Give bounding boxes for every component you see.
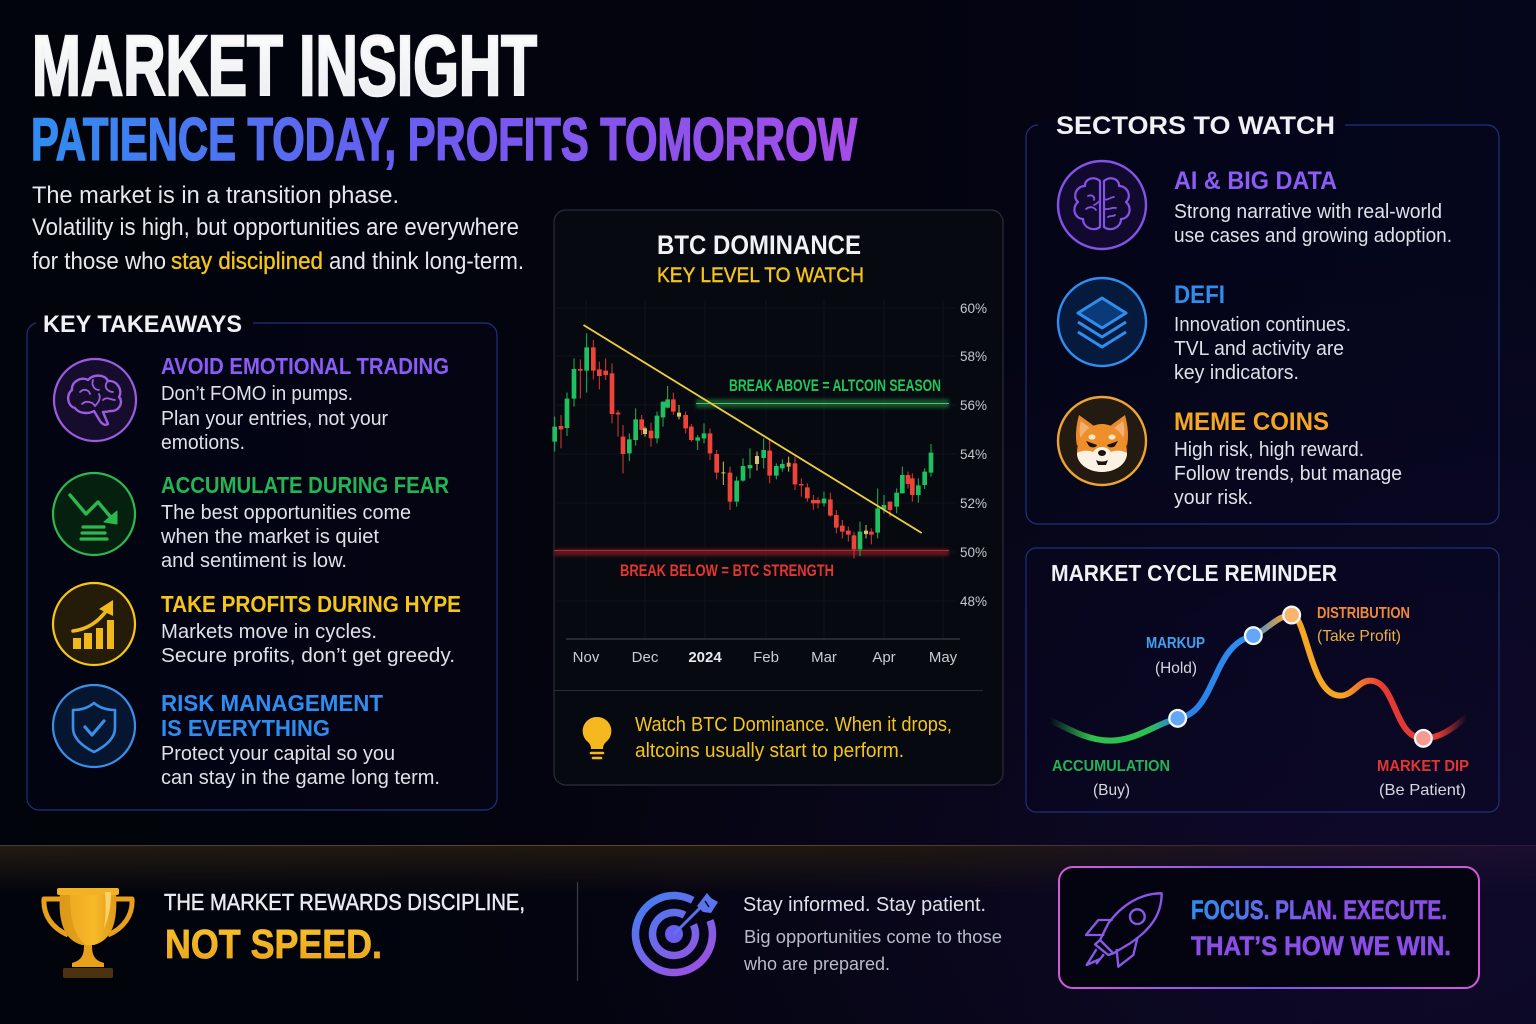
footer message	[164, 889, 525, 967]
y axis: 50%	[960, 545, 987, 560]
item: take profits during hype: Secure profits, don’t get greedy.	[161, 645, 455, 667]
item: defi: key indicators.	[1174, 362, 1299, 384]
marker: markup start	[1169, 710, 1186, 727]
chart note: Watch BTC Dominance. When it drops,	[635, 714, 952, 736]
y axis: 58%	[960, 349, 987, 364]
item: ai and big data: Strong narrative with real-world	[1174, 201, 1442, 223]
footer note: Stay informed. Stay patient.	[743, 894, 986, 916]
label: break above: BREAK ABOVE = ALTCOIN SEASON	[729, 377, 941, 395]
panel: sectors to watch	[1026, 112, 1499, 524]
icon: falling arrow	[53, 473, 135, 555]
candlestick chart	[554, 300, 987, 666]
icon: rising bars	[53, 583, 135, 665]
item: defi: TVL and activity are	[1174, 338, 1344, 360]
candles	[555, 333, 931, 558]
label: distribution: DISTRIBUTION	[1317, 605, 1410, 622]
item: defi: DEFI	[1174, 281, 1225, 309]
label: markup: MARKUP	[1146, 635, 1205, 652]
marker: markup	[1245, 627, 1262, 644]
item: risk management: Protect your capital so you	[161, 743, 395, 765]
chart heading: KEY LEVEL TO WATCH	[657, 263, 864, 287]
icon: light bulb	[583, 717, 611, 758]
intro text	[32, 182, 524, 275]
footer note: Big opportunities come to those	[744, 926, 1002, 947]
footer note: who are prepared.	[743, 953, 890, 974]
item: avoid emotional trading: AVOID EMOTIONAL TRADING	[161, 353, 449, 379]
panel: market cycle reminder	[1026, 548, 1499, 812]
item: meme coins: High risk, high reward.	[1174, 439, 1364, 461]
y axis: 54%	[960, 447, 987, 462]
y axis	[960, 301, 987, 609]
heading: key takeaways: KEY TAKEAWAYS	[43, 311, 242, 338]
x axis	[573, 649, 958, 666]
label: accumulation: (Buy)	[1093, 782, 1130, 799]
subtitle: PATIENCE TODAY, PROFITS TOMORROW	[31, 106, 857, 173]
cta text: THAT’S HOW WE WIN.	[1191, 931, 1451, 961]
item: risk management: IS EVERYTHING	[161, 715, 330, 741]
call to action box	[1059, 867, 1479, 988]
item: risk management: RISK MANAGEMENT	[161, 690, 383, 716]
icon: shield	[53, 685, 135, 767]
label: accumulation: ACCUMULATION	[1052, 758, 1170, 775]
item: risk management	[161, 690, 440, 789]
item: avoid emotional trading	[161, 353, 449, 454]
x axis: Dec	[632, 649, 659, 666]
label: market dip: (Be Patient)	[1379, 782, 1466, 799]
footer message: THE MARKET REWARDS DISCIPLINE,	[164, 889, 525, 915]
panel: key takeaways	[27, 311, 497, 810]
cta text	[1191, 895, 1451, 961]
intro text: and think long-term.	[329, 248, 524, 275]
resistance level	[696, 399, 949, 408]
item: meme coins: Follow trends, but manage	[1174, 463, 1402, 485]
label: accumulation	[1052, 758, 1170, 799]
marker: distribution	[1283, 607, 1300, 623]
label: distribution	[1317, 605, 1410, 645]
y axis: 52%	[960, 496, 987, 511]
label: distribution: (Take Profit)	[1317, 628, 1401, 645]
item: accumulate during fear: when the market is quiet	[160, 526, 379, 548]
cycle curve	[1050, 607, 1467, 747]
icon: trophy	[44, 888, 132, 978]
chart heading	[657, 230, 864, 287]
item: meme coins: your risk.	[1174, 487, 1253, 509]
footer band	[0, 845, 1536, 988]
item: avoid emotional trading: Plan your entries, not your	[161, 408, 388, 430]
icon: ai brain	[1058, 161, 1146, 249]
chart heading: BTC DOMINANCE	[657, 230, 861, 260]
panel: btc dominance	[554, 210, 1003, 785]
cta text: FOCUS. PLAN. EXECUTE.	[1191, 895, 1447, 925]
trendline	[584, 325, 922, 533]
label: markup	[1146, 635, 1205, 677]
item: avoid emotional trading: emotions.	[161, 432, 245, 454]
heading: market cycle: MARKET CYCLE REMINDER	[1051, 560, 1337, 586]
support level	[554, 549, 949, 556]
item: ai and big data: AI & BIG DATA	[1174, 167, 1337, 195]
item: accumulate during fear: and sentiment is low.	[161, 550, 347, 572]
label: market dip	[1377, 758, 1469, 799]
title	[31, 19, 857, 173]
intro text: stay disciplined	[171, 248, 323, 275]
x axis: May	[929, 649, 958, 666]
item: meme coins: MEME COINS	[1174, 408, 1329, 436]
item: defi	[1174, 281, 1351, 384]
item: defi: Innovation continues.	[1174, 314, 1351, 336]
y axis: 48%	[960, 594, 987, 609]
x axis: Apr	[872, 649, 896, 666]
item: ai and big data	[1174, 167, 1452, 247]
label: markup: (Hold)	[1155, 660, 1197, 677]
item: avoid emotional trading: Don’t FOMO in pumps.	[161, 383, 353, 405]
item: accumulate during fear: ACCUMULATE DURING FEAR	[161, 472, 449, 498]
x axis: Nov	[573, 649, 600, 666]
footer message: NOT SPEED.	[165, 921, 382, 967]
footer note	[743, 894, 1002, 974]
x axis: 2024	[688, 649, 722, 666]
x axis: Mar	[811, 649, 837, 666]
icon: brain	[54, 359, 136, 441]
chart note	[635, 714, 952, 762]
intro text: Volatility is high, but opportunities are everywhere	[32, 214, 519, 241]
label: break below: BREAK BELOW = BTC STRENGTH	[620, 562, 834, 580]
item: risk management: can stay in the game long term.	[161, 767, 440, 789]
icon: layers	[1058, 278, 1146, 366]
item: accumulate during fear: The best opportunities come	[161, 502, 411, 524]
item: take profits during hype: Markets move in cycles.	[161, 621, 377, 643]
icon: rocket	[1086, 893, 1162, 967]
intro text: The market is in a transition phase.	[32, 182, 399, 209]
item: accumulate during fear	[160, 472, 449, 572]
x axis: Feb	[753, 649, 779, 666]
item: meme coins	[1174, 408, 1402, 509]
title: MARKET INSIGHT	[32, 19, 537, 114]
item: ai and big data: use cases and growing adoption.	[1174, 225, 1452, 247]
chart note: altcoins usually start to perform.	[635, 740, 904, 762]
y axis: 56%	[960, 398, 987, 413]
label: market dip: MARKET DIP	[1377, 758, 1469, 775]
item: take profits during hype: TAKE PROFITS DURING HYPE	[161, 591, 461, 617]
icon: shiba coin	[1058, 397, 1146, 485]
marker: market dip	[1415, 730, 1432, 747]
heading: sectors: SECTORS TO WATCH	[1056, 112, 1335, 140]
intro text: for those who	[32, 248, 166, 275]
item: take profits during hype	[161, 591, 461, 667]
y axis: 60%	[960, 301, 987, 316]
icon: target	[635, 893, 718, 973]
